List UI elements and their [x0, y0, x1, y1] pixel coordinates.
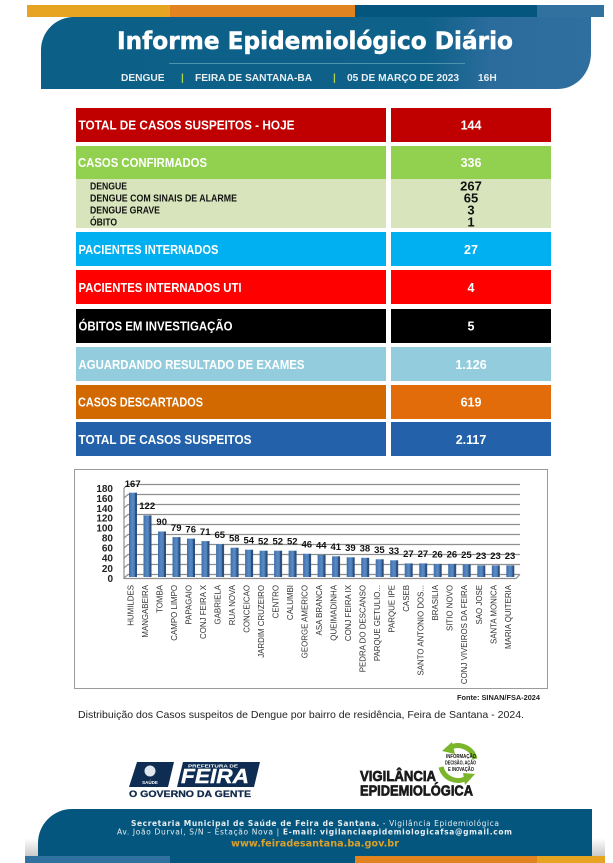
footer banner	[25, 809, 605, 856]
category labels: CONJ VIVEIROS DA FEIRA	[460, 584, 469, 684]
bar value labels: 23	[490, 551, 501, 562]
category labels: CONJ FEIRA X	[199, 584, 208, 639]
category labels	[126, 584, 513, 684]
y axis labels: 0	[107, 574, 113, 585]
category labels: TOMBA	[156, 584, 164, 613]
category labels: SITIO NOVO	[446, 585, 455, 631]
category labels: MARIA QUITERIA	[504, 584, 513, 649]
table row: aguardando resultado	[76, 347, 551, 381]
category labels: PEDRA DO DESCANSO	[359, 585, 368, 672]
table row: obitos em investigacao: 5	[468, 320, 475, 334]
category labels: JARDIM CRUZEIRO	[257, 585, 266, 658]
table row: pacientes internados: 27	[464, 243, 478, 257]
logo: vigilancia epidemiologica: INFORMAÇÃO	[446, 753, 476, 760]
bar value labels: 46	[302, 540, 312, 550]
table row: casos confirmados: 336	[461, 156, 481, 170]
y axis labels: 100	[96, 524, 113, 534]
confirmed cases breakdown: DENGUE	[90, 182, 127, 192]
category labels: GEORGE AMERICO	[301, 585, 310, 658]
category labels: HUMILDES	[126, 585, 136, 626]
y axis labels: 60	[102, 544, 113, 554]
category labels: CAMPO LIMPO	[170, 585, 179, 641]
table row: casos confirmados	[76, 146, 551, 179]
bar chart	[74, 470, 548, 688]
chart caption: Distribuição dos Casos suspeitos de Dengue por bairro de residência, Feira de Santana - 2024.	[78, 710, 524, 721]
table row: pacientes internados	[76, 232, 551, 266]
subtitle: FEIRA DE SANTANA-BA	[195, 73, 313, 84]
logo: vigilancia epidemiologica: EPIDEMIOLÓGICA	[360, 782, 473, 800]
logo: vigilancia epidemiologica: VIGILÂNCIA	[360, 767, 436, 785]
category labels: CALUMBI	[286, 585, 295, 620]
subtitle: |	[181, 73, 184, 84]
confirmed cases breakdown: 1	[467, 214, 475, 230]
y axis labels: 40	[102, 554, 113, 564]
footer website: www.feiradesantana.ba.gov.br	[231, 838, 399, 850]
category labels: MANGABEIRA	[141, 584, 150, 638]
category labels: SANTO ANTONIO DOS...	[417, 585, 426, 675]
bar value labels: 27	[418, 549, 428, 560]
table row: total casos suspeitos: 2.117	[456, 433, 486, 447]
confirmed cases breakdown: 267	[460, 178, 482, 194]
bar value labels: 41	[331, 542, 342, 553]
subtitle: DENGUE	[121, 73, 165, 84]
category labels: CENTRO	[272, 585, 281, 618]
table row: casos descartados: 619	[461, 396, 481, 410]
bar value labels: 122	[139, 501, 155, 512]
category labels: CONJ FEIRA IX	[344, 584, 353, 641]
bar value labels: 44	[316, 540, 327, 552]
subtitle: 16H	[478, 73, 497, 84]
logo: prefeitura de feira: SAÚDE	[142, 779, 158, 785]
footer banner: Av. João Durval, S/N – Estação Nova | E-mail: vigilanciaepidemiologicafsa@gmail.com	[117, 828, 512, 836]
category labels: GABRIELA	[214, 584, 223, 624]
subtitle: |	[333, 73, 336, 84]
bar value labels: 26	[447, 550, 457, 560]
table row: pacientes internados UTI: 4	[468, 281, 475, 295]
table row: pacientes internados UTI	[76, 270, 551, 304]
y axis labels	[96, 484, 113, 585]
category labels: PAPAGAIO	[184, 585, 194, 625]
bar value labels: 52	[287, 536, 298, 548]
confirmed cases breakdown: 3	[467, 202, 475, 218]
y axis labels: 80	[102, 534, 113, 544]
category labels: RUA NOVA	[228, 584, 237, 625]
bar value labels: 71	[200, 527, 211, 538]
logo: vigilancia epidemiologica	[360, 742, 476, 800]
table row: casos descartados: CASOS DESCARTADOS	[78, 394, 203, 410]
table row: total suspeitos hoje: TOTAL DE CASOS SUSPEITOS - HOJE	[78, 118, 295, 132]
logo: vigilancia epidemiologica: E INOVAÇÃO	[448, 766, 474, 773]
table row: total casos suspeitos: TOTAL DE CASOS SUSPEITOS	[78, 432, 252, 447]
bar value labels: 27	[403, 549, 414, 560]
bar value labels: 23	[476, 551, 486, 562]
y axis labels: 160	[96, 494, 113, 505]
logo: prefeitura de feira: PREFEITURA DE	[188, 764, 238, 768]
logo: prefeitura de feira: FEIRA	[181, 765, 249, 788]
category labels: PARQUE GETULIO...	[373, 585, 382, 661]
bar value labels: 65	[215, 530, 226, 541]
category labels: ASA BRANCA	[315, 584, 324, 635]
category labels: CONCEICAO	[243, 585, 252, 633]
bar value labels: 33	[389, 546, 399, 557]
footer colour bars	[25, 856, 605, 863]
bar value labels: 38	[360, 544, 370, 554]
y axis labels: 180	[96, 484, 113, 495]
bar value labels: 76	[185, 524, 196, 536]
bar value labels: 26	[432, 550, 443, 560]
header colour bars	[27, 5, 604, 17]
category labels: SAO JOSE	[475, 585, 484, 624]
table row: pacientes internados: PACIENTES INTERNADOS	[78, 242, 219, 257]
source note: Fonte: SINAN/FSA-2024	[457, 695, 540, 702]
y axis labels: 140	[96, 504, 113, 515]
confirmed cases breakdown	[76, 178, 551, 230]
table row: aguardando resultado: AGUARDANDO RESULTADO DE EXAMES	[78, 357, 305, 372]
bar value labels: 23	[505, 551, 515, 562]
logo: prefeitura de feira: O GOVERNO DA GENTE	[129, 789, 251, 799]
table row: casos confirmados: CASOS CONFIRMADOS	[78, 155, 207, 170]
table row: total suspeitos hoje	[76, 108, 551, 142]
bar value labels	[125, 479, 515, 562]
bar value labels: 35	[374, 545, 385, 556]
bar value labels: 52	[258, 536, 269, 548]
table row: pacientes internados UTI: PACIENTES INTERNADOS UTI	[78, 280, 242, 295]
table row: obitos em investigacao	[76, 309, 551, 343]
category labels: SANTA MONICA	[489, 584, 498, 644]
confirmed cases breakdown: 65	[464, 190, 478, 206]
header banner	[41, 17, 591, 89]
confirmed cases breakdown: DENGUE COM SINAIS DE ALARME	[90, 194, 237, 204]
bar value labels: 25	[461, 550, 472, 561]
y axis labels: 20	[102, 564, 113, 575]
logo: prefeitura de feira	[129, 762, 260, 799]
table row: total casos suspeitos	[76, 422, 551, 456]
bar value labels: 90	[156, 517, 167, 528]
bar value labels: 79	[171, 523, 181, 534]
bar value labels: 52	[273, 536, 283, 548]
table row: obitos em investigacao: ÓBITOS EM INVESTIGAÇÃO	[78, 318, 233, 334]
table row: total suspeitos hoje: 144	[461, 118, 481, 132]
table row: aguardando resultado: 1.126	[455, 358, 487, 372]
logo: vigilancia epidemiologica: DECISÃO, AÇÃO	[445, 760, 476, 766]
confirmed cases breakdown: ÓBITO	[90, 216, 117, 228]
confirmed cases breakdown: DENGUE GRAVE	[90, 206, 160, 216]
bar value labels: 54	[244, 536, 255, 546]
table row: casos descartados	[76, 385, 551, 419]
bar value labels: 167	[125, 479, 141, 490]
category labels: QUEIMADINHA	[330, 584, 339, 641]
y axis labels: 120	[96, 514, 113, 524]
category labels: PARQUE IPE	[388, 585, 397, 633]
bar value labels: 58	[229, 534, 240, 544]
category labels: BRASILIA	[431, 584, 440, 621]
category labels: CASEB	[402, 585, 411, 612]
subtitle: 05 DE MARÇO DE 2023	[347, 73, 459, 84]
footer address text: Secretaria Municipal de Saúde de Feira de Santana. - Vigilância Epidemiológica	[131, 819, 499, 828]
bars	[129, 493, 514, 577]
title: Informe Epidemiológico Diário	[117, 27, 513, 55]
bar value labels: 39	[345, 543, 356, 554]
